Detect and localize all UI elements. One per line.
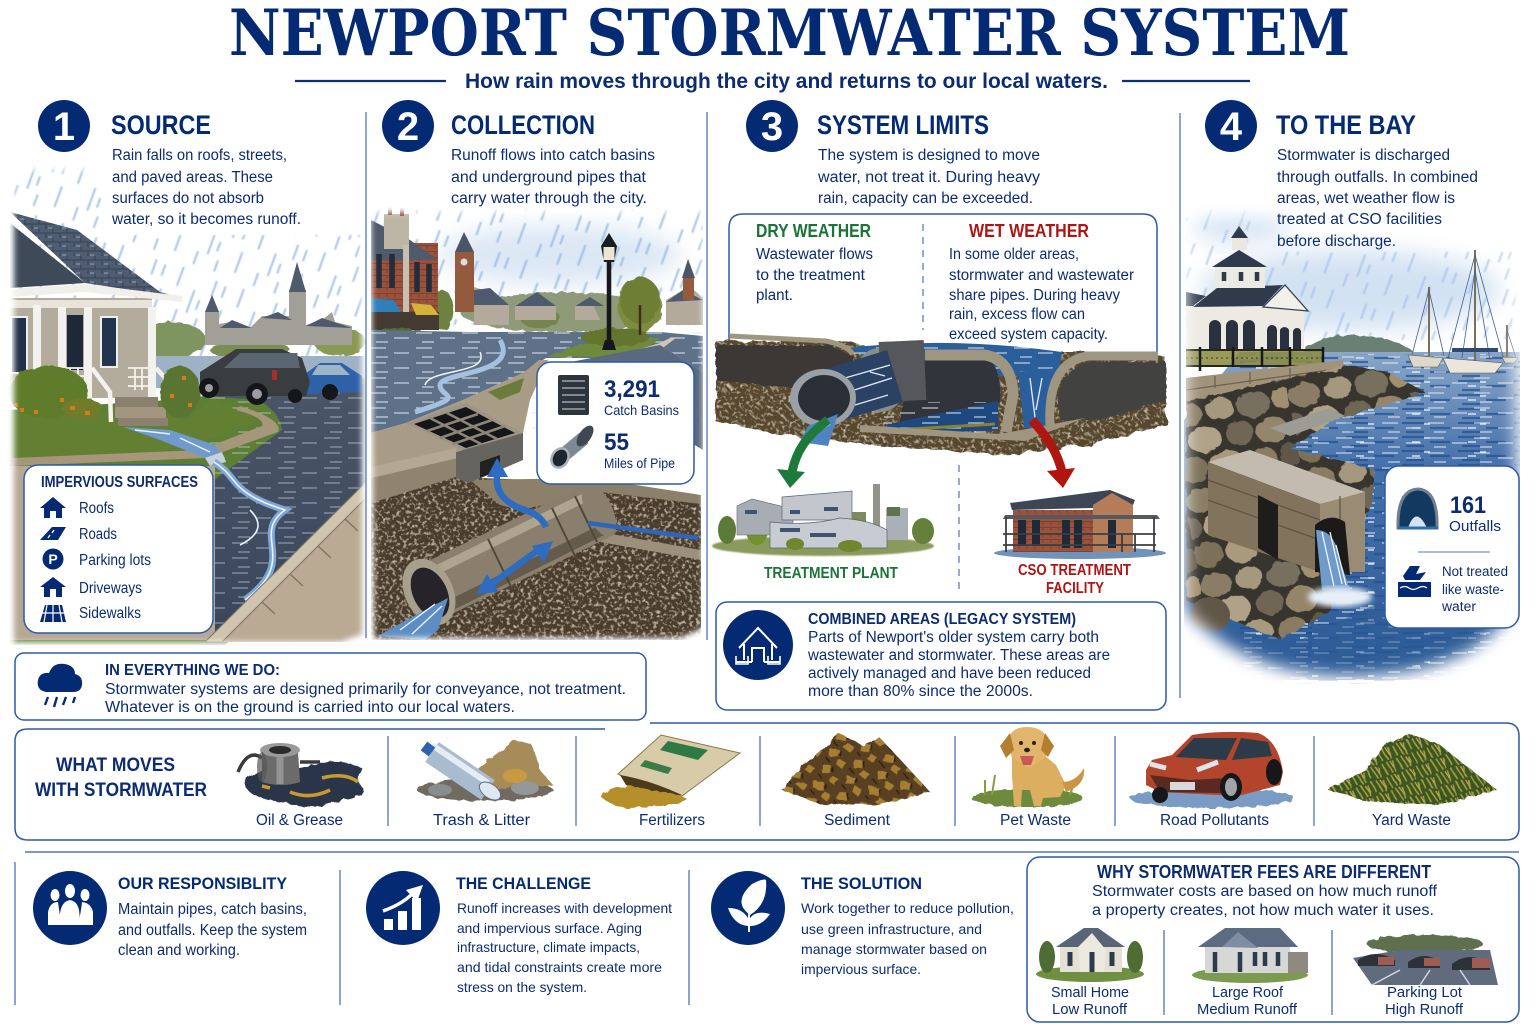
heading: WHAT MOVES (56, 755, 175, 776)
labels: property types: Medium Runoff (1197, 1001, 1298, 1018)
panel: impervious surfaces: IMPERVIOUS SURFACES (41, 474, 198, 491)
callout: in everything we do: Whatever is on the ground is carried into our local waters. (105, 699, 515, 716)
step 4: to the bay: Stormwater is discharged (1277, 147, 1450, 164)
panel: outfall stats (1385, 466, 1519, 628)
label: CSO treatment facility: CSO TREATMENT (1018, 562, 1131, 579)
panel: impervious surfaces: P (48, 551, 58, 567)
icon: parking lot (1353, 935, 1498, 985)
item labels: Fertilizers (639, 812, 705, 829)
panel: the challenge (366, 871, 672, 995)
step 4: to the bay: treated at CSO facilities (1277, 211, 1442, 228)
callout: in everything we do: Stormwater systems are designed primarily for conveyance, not treatment. (105, 681, 626, 698)
item labels: Yard Waste (1372, 812, 1451, 829)
step 3: system limits: water, not treat it. During heavy (817, 169, 1040, 186)
panel: the challenge: Runoff increases with development (457, 900, 672, 916)
panel: the solution: Work together to reduce pollution, (801, 900, 1014, 916)
illustration: harbor and outfall (1184, 205, 1520, 684)
panel: collection stats: 55 (604, 429, 629, 456)
panel: why stormwater fees are different: WHY STORMWATER FEES ARE DIFFERENT (1097, 862, 1431, 882)
labels: property types (1051, 984, 1464, 1018)
icon: fertilizer (600, 735, 740, 808)
step 1: source: 1 (53, 105, 75, 149)
step 4: to the bay: 4 (1220, 105, 1243, 149)
panel: the solution: THE SOLUTION (801, 874, 922, 893)
icon: trash and litter (417, 740, 553, 804)
panel: collection stats (537, 362, 694, 484)
panel: combined areas: actively managed and have been reduced (808, 665, 1091, 682)
icon: people (48, 884, 93, 925)
icon: lamp post (601, 233, 617, 350)
step 1: source: water, so it becomes runoff. (111, 211, 301, 228)
step 3: system limits: 3 (761, 105, 783, 149)
panel: what moves with stormwater (15, 723, 1519, 840)
text: dry weather: Wastewater flows (756, 246, 873, 263)
panel: the challenge: and tidal constraints create more (457, 959, 662, 975)
item labels: Sediment (824, 812, 891, 829)
step 1: source (38, 100, 301, 228)
text: wet weather: exceed system capacity. (949, 326, 1108, 343)
step 2: collection: and underground pipes that (451, 169, 647, 186)
panel: collection stats: Miles of Pipe (604, 455, 675, 471)
icon: small home (1036, 928, 1144, 982)
icon: house (8, 212, 200, 426)
panel: system limits text box (729, 214, 1157, 362)
panel: our responsibility: and outfalls. Keep the system (118, 922, 307, 939)
heading: WITH STORMWATER (35, 780, 207, 801)
labels: property types: Small Home (1051, 984, 1129, 1001)
panel: impervious surfaces: Parking lots (79, 552, 151, 569)
step 2: collection: Runoff flows into catch basins (451, 147, 655, 164)
arrow: to treatment plant (777, 420, 828, 488)
text: dry weather: to the treatment (756, 267, 866, 284)
icon: oil and grease (238, 743, 363, 807)
panel: impervious surfaces: Driveways (79, 580, 142, 597)
step 2: collection (382, 100, 655, 207)
panel: combined areas: more than 80% since the 2000s. (808, 683, 1033, 700)
arrow: flow into pipe (476, 458, 553, 594)
panel: combined areas: COMBINED AREAS (LEGACY SYSTEM) (808, 611, 1076, 628)
illustration: overflowing pipe (716, 336, 1166, 455)
icon: rising chart (383, 885, 423, 930)
panel: the solution: manage stormwater based on (801, 941, 987, 957)
icon: pavilion (1186, 226, 1324, 371)
labels: property types: Low Runoff (1052, 1001, 1128, 1018)
label: CSO treatment facility: FACILITY (1046, 580, 1105, 597)
icon: pet waste dog (971, 727, 1084, 807)
panel: impervious surfaces (24, 465, 213, 633)
icon: leaf (728, 880, 770, 932)
step 3: system limits: SYSTEM LIMITS (817, 110, 989, 140)
text: wet weather (949, 221, 1134, 343)
panel: why stormwater fees are different: a property creates, not how much water it uses. (1092, 902, 1434, 919)
item labels (256, 812, 1451, 829)
step 3: system limits: The system is designed to move (818, 147, 1040, 164)
item labels: Pet Waste (1000, 812, 1071, 829)
step 2: collection: carry water through the city. (451, 190, 647, 207)
panel: outfall stats: 161 (1450, 492, 1486, 519)
heading (35, 755, 207, 801)
panel: combined areas (716, 602, 1166, 710)
step 4: to the bay: before discharge. (1277, 233, 1396, 250)
panel: outfall stats: Outfalls (1449, 518, 1501, 535)
item labels: Oil & Grease (256, 812, 343, 829)
illustration: catch basin and pipe (370, 205, 706, 640)
step 2: collection: COLLECTION (451, 110, 595, 140)
panel: the solution (711, 871, 1014, 977)
step 1: source: SOURCE (111, 110, 211, 140)
step 1: source: Rain falls on roofs, streets, (112, 147, 287, 164)
step 2: collection: 2 (397, 105, 419, 149)
panel: combined areas: wastewater and stormwater. These areas are (807, 647, 1110, 664)
text: wet weather: stormwater and wastewater (949, 267, 1134, 284)
label: CSO treatment facility (1018, 562, 1131, 597)
icon: cars (199, 349, 362, 405)
text: dry weather: DRY WEATHER (756, 221, 871, 241)
text: dry weather: plant. (756, 287, 793, 304)
panel: the solution: use green infrastructure, and (801, 921, 982, 937)
panel: our responsibility (33, 871, 307, 959)
panel: outfall stats: Not treated (1442, 564, 1508, 579)
illustration: treatment plant (712, 484, 934, 556)
panel: impervious surfaces: Sidewalks (79, 605, 141, 622)
panel: our responsibility: Maintain pipes, catch basins, (118, 901, 307, 918)
text: wet weather: share pipes. During heavy (949, 287, 1120, 304)
icon: sediment (782, 733, 930, 805)
panel: impervious surfaces: Roofs (79, 500, 114, 517)
step 4: to the bay: areas, wet weather flow is (1277, 190, 1455, 207)
text: wet weather: In some older areas, (949, 246, 1079, 263)
panel: why stormwater fees are different: Stormwater costs are based on how much runoff (1092, 883, 1438, 900)
labels: property types: High Runoff (1385, 1001, 1464, 1018)
callout: in everything we do (15, 653, 646, 720)
arrow: to CSO facility (1032, 420, 1075, 488)
step 1: source: and paved areas. These (112, 169, 273, 186)
item labels: Road Pollutants (1160, 812, 1269, 829)
panel: combined areas: Parts of Newport's older system carry both (808, 629, 1099, 646)
step 4: to the bay: TO THE BAY (1276, 110, 1416, 140)
subtitle: How rain moves through the city and returns to our local waters. (465, 70, 1108, 93)
panel: our responsibility: OUR RESPONSIBLITY (118, 874, 288, 893)
panel: the challenge: THE CHALLENGE (456, 874, 591, 893)
icon: road pollutants car (1130, 732, 1294, 808)
labels: property types: Parking Lot (1387, 984, 1463, 1001)
panel: collection stats: Catch Basins (604, 402, 679, 418)
item labels: Trash & Litter (433, 812, 530, 829)
panel: our responsibility: clean and working. (118, 942, 240, 959)
illustration: CSO facility (994, 490, 1166, 559)
icon: outfall (1208, 450, 1372, 607)
icon: yard waste (1328, 733, 1497, 805)
text: dry weather (756, 221, 873, 304)
panel: the challenge: infrastructure, climate impacts, (457, 939, 640, 955)
text: wet weather: rain, excess flow can (949, 306, 1085, 323)
panel: impervious surfaces: Roads (79, 526, 117, 543)
illustration: rainy house and street (8, 165, 370, 645)
panel: the challenge: and impervious surface. Aging (457, 920, 642, 936)
step 1: source: surfaces do not absorb (112, 190, 264, 207)
panel: why stormwater fees are different (1027, 857, 1519, 1022)
panel: collection stats: 3,291 (604, 376, 660, 403)
panel: outfall stats: like waste- (1442, 582, 1504, 597)
panel: the solution: impervious surface. (801, 961, 921, 977)
labels: property types: Large Roof (1212, 984, 1284, 1001)
step 3: system limits: rain, capacity can be exceeded. (818, 190, 1033, 207)
step 3: system limits (746, 100, 1040, 207)
step 4: to the bay: through outfalls. In combined (1277, 169, 1478, 186)
text: wet weather: WET WEATHER (969, 221, 1089, 241)
panel: the challenge: stress on the system. (457, 979, 587, 995)
icon: sailboats (1408, 250, 1518, 373)
label: treatment plant: TREATMENT PLANT (764, 565, 898, 582)
icon: large roof (1192, 928, 1308, 983)
step 4: to the bay (1205, 100, 1478, 250)
callout: in everything we do: IN EVERYTHING WE DO: (105, 662, 280, 679)
panel: outfall stats: water (1441, 599, 1477, 614)
